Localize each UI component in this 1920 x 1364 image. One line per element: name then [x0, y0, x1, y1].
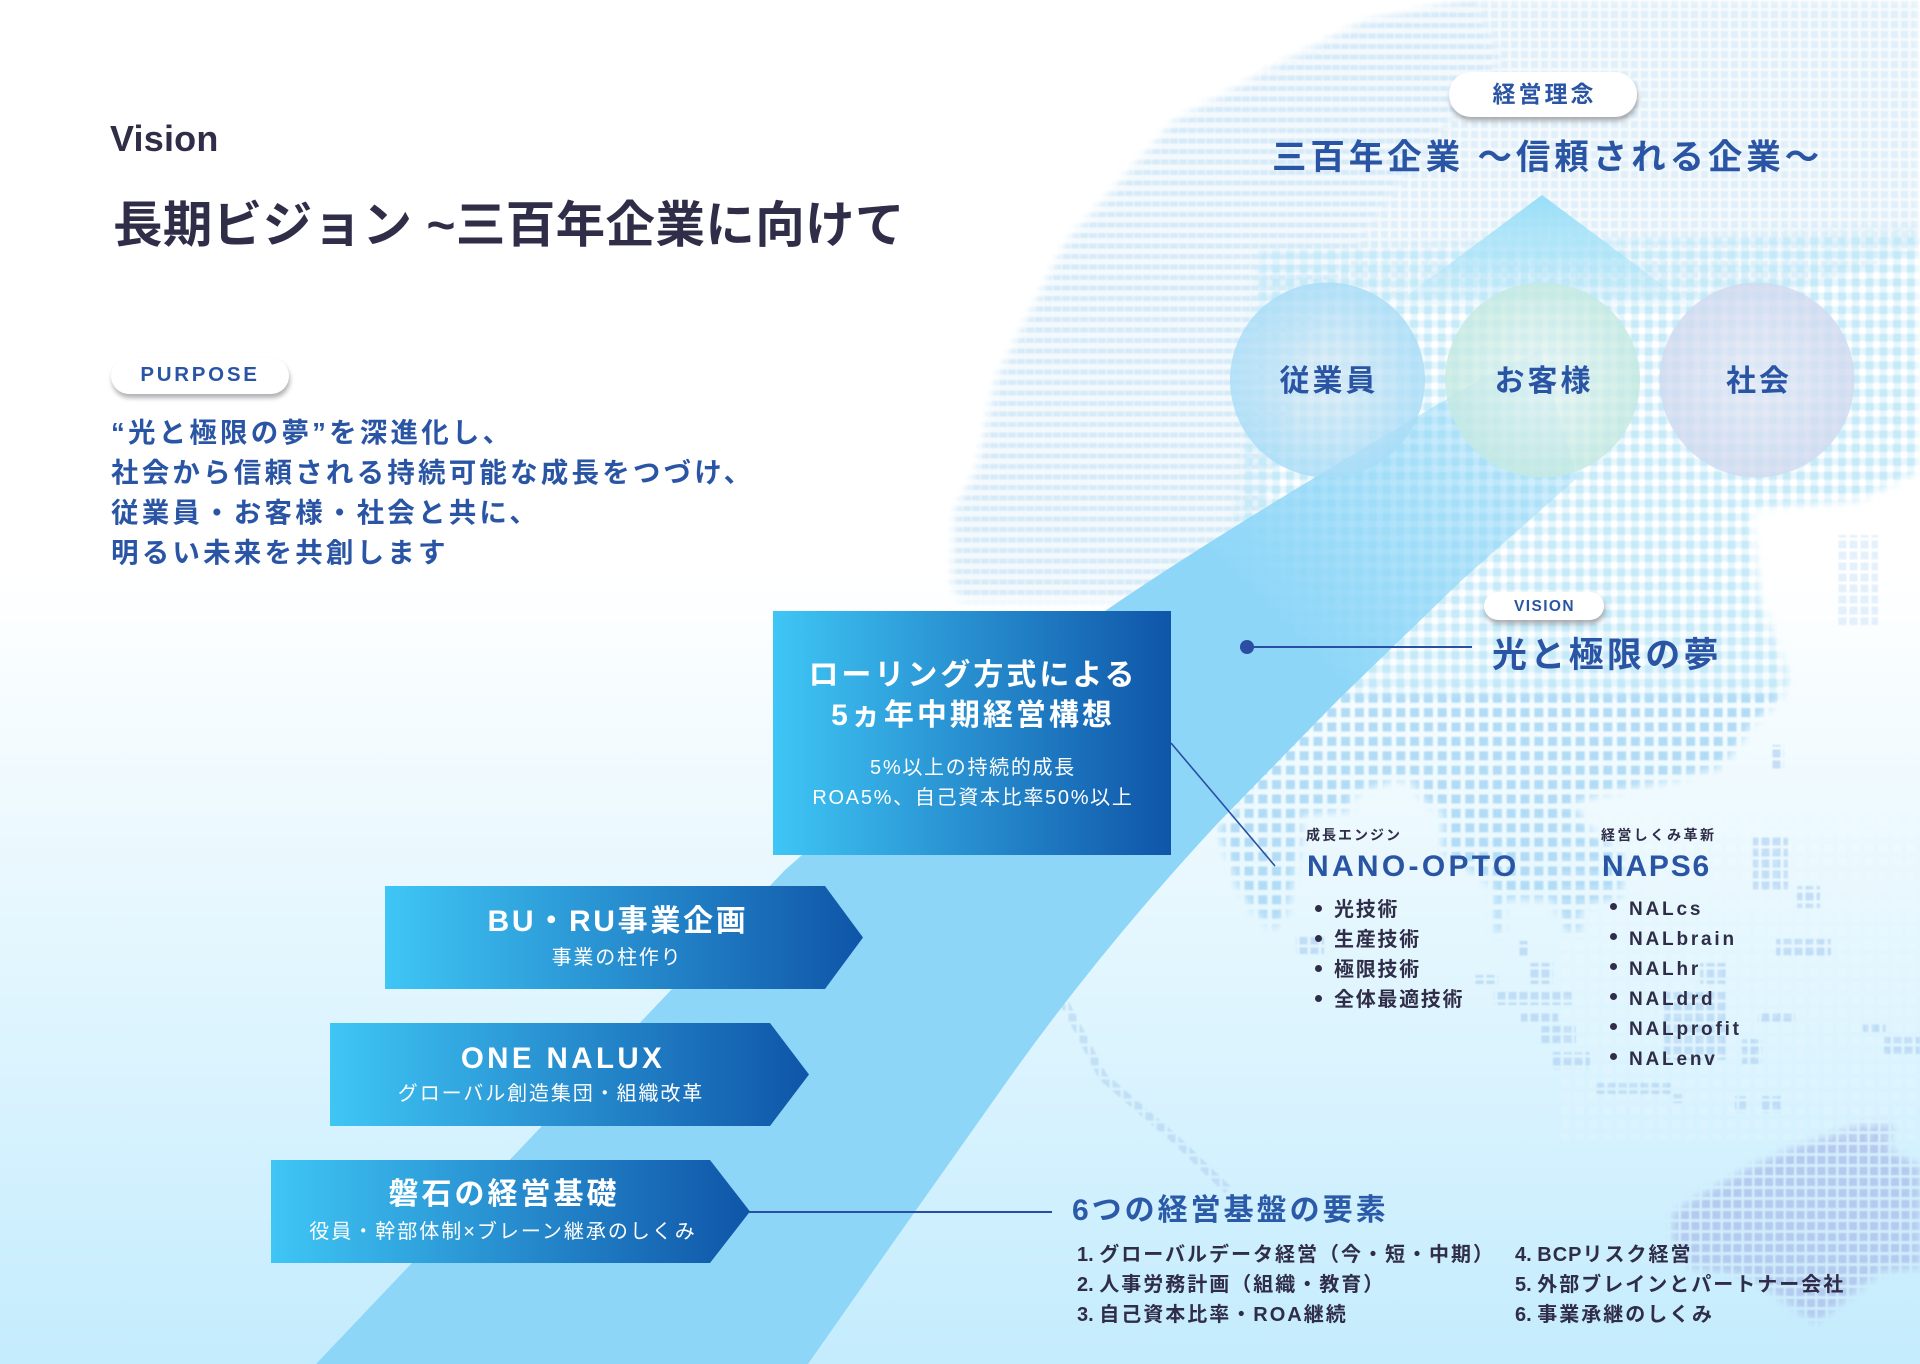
purpose statement: 社会から信頼される持続可能な成長をつづけ、: [111, 457, 754, 488]
purpose statement: 明るい未来を共創します: [111, 537, 449, 568]
heading: 6つの経営基盤の要素: [1072, 1194, 1389, 1227]
bullet list: NALbrain: [1629, 929, 1737, 950]
arrow subtext: 事業の柱作り: [552, 947, 682, 969]
panel: six management foundation elements: [1072, 1194, 1845, 1326]
arrowhead triangle above circles: [1385, 195, 1699, 312]
page title: 長期ビジョン ~三百年企業に向けて: [113, 198, 905, 253]
vision heading: 光と極限の夢: [1492, 636, 1722, 674]
connector from box to growth engine: [1171, 743, 1275, 866]
philosophy pill: [1449, 72, 1637, 117]
arrow: solid management foundation: [271, 1160, 750, 1263]
label: employees: 従業員: [1280, 365, 1378, 398]
elements column two: 4. BCPリスク経営: [1515, 1244, 1692, 1266]
elements column one: [1077, 1244, 1495, 1326]
arrow subtext: 役員・幹部体制×ブレーン継承のしくみ: [309, 1221, 697, 1243]
arrow heading: 磐石の経営基礎: [388, 1178, 620, 1211]
arrow: ONE NALUX: [330, 1023, 809, 1126]
circle: customers: [1445, 282, 1640, 478]
arrow: BU RU planning: [385, 886, 863, 989]
plan heading: 5ヵ年中期経営構想: [831, 698, 1115, 732]
bullet list: 全体最適技術: [1334, 989, 1464, 1011]
bullet list: 光技術: [1334, 899, 1399, 921]
circle: society: [1660, 282, 1854, 478]
purpose statement: “光と極限の夢”を深進化し、: [111, 417, 513, 448]
heading: NAPS6: [1602, 850, 1711, 883]
purpose statement: 従業員・お客様・社会と共に、: [111, 497, 540, 528]
arrow heading: ONE NALUX: [461, 1042, 665, 1074]
panel: five year plan: [773, 611, 1171, 855]
page label: Vision: Vision: [110, 118, 219, 158]
vision pill: [1484, 592, 1604, 620]
plan targets: ROA5%、自己資本比率50%以上: [812, 786, 1134, 808]
panel: vision: [1482, 592, 1722, 674]
subheading: 経営しくみ革新: [1601, 827, 1716, 843]
purpose pill: PURPOSE: [140, 363, 260, 386]
bullet list: 生産技術: [1334, 929, 1421, 951]
plan heading: ローリング方式による: [808, 659, 1138, 692]
purpose pill: [111, 358, 289, 394]
arrow heading: BU・RU事業企画: [488, 904, 748, 938]
plan targets: [812, 756, 1134, 808]
elements column one: 1. グローバルデータ経営（今・短・中期）: [1077, 1244, 1495, 1266]
vision connector dot and line: [1240, 640, 1472, 654]
philosophy heading: 三百年企業 ～信頼される企業～: [1272, 139, 1823, 177]
label: society: 社会: [1726, 365, 1792, 398]
elements column two: 5. 外部ブレインとパートナー会社: [1515, 1274, 1845, 1296]
philosophy pill: 経営理念: [1492, 81, 1596, 107]
bullet list: NALprofit: [1629, 1019, 1742, 1040]
purpose statement: [111, 417, 754, 568]
bullet list: [1315, 898, 1464, 1011]
plan targets: 5%以上の持続的成長: [870, 756, 1076, 778]
bullet list: 極限技術: [1334, 959, 1421, 981]
plan heading: [808, 658, 1138, 732]
ascending light blue band: [316, 350, 1577, 1364]
elements column one: 2. 人事労務計画（組織・教育）: [1077, 1274, 1385, 1296]
bullet list: [1610, 899, 1742, 1070]
panel: NANO-OPTO: [1306, 827, 1519, 1011]
connector from foundation arrow to six elements: [748, 1211, 1052, 1213]
subheading: 成長エンジン: [1306, 827, 1402, 843]
arrow subtext: グローバル創造集団・組織改革: [398, 1083, 704, 1105]
elements column two: 6. 事業承継のしくみ: [1515, 1304, 1714, 1326]
heading: NANO-OPTO: [1307, 850, 1519, 883]
panel: management philosophy: [1272, 72, 1823, 398]
bullet list: NALhr: [1629, 959, 1701, 980]
elements column two: [1515, 1244, 1845, 1326]
panel: NAPS6: [1601, 827, 1742, 1070]
world map dots: [949, 0, 1920, 1324]
label: customers: お客様: [1494, 365, 1594, 398]
circle: employees: [1230, 282, 1425, 478]
panel: purpose: [110, 363, 754, 568]
elements column one: 3. 自己資本比率・ROA継続: [1077, 1304, 1348, 1326]
bullet list: NALdrd: [1629, 989, 1715, 1010]
bullet list: NALenv: [1629, 1049, 1718, 1070]
bullet list: NALcs: [1629, 899, 1703, 920]
vision pill: VISION: [1514, 598, 1575, 615]
